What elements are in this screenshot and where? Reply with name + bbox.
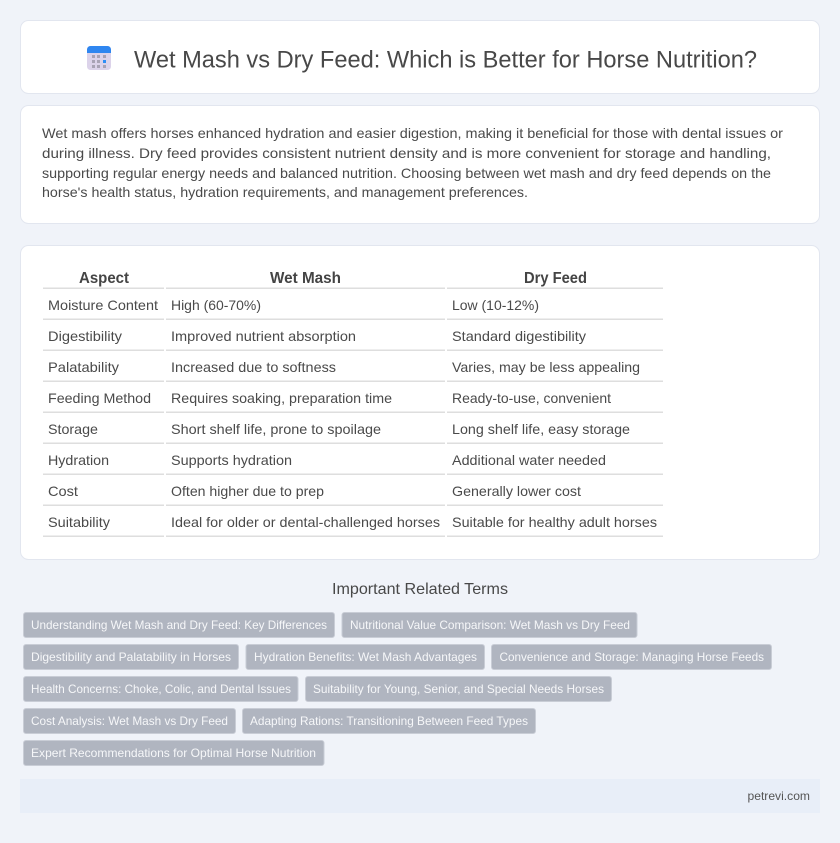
row: moisture content (48, 297, 539, 313)
row: palatability: Palatability (48, 359, 119, 375)
row: suitability: Suitability (48, 514, 110, 530)
row: palatability: Varies, may be less appealing (452, 359, 640, 375)
row: suitability: Ideal for older or dental-challenged horses (171, 514, 440, 530)
tag (24, 612, 334, 638)
table header (79, 270, 587, 287)
row: storage: Long shelf life, easy storage (452, 421, 630, 437)
row: feeding method: Feeding Method (48, 390, 151, 406)
row: moisture content: High (60-70%) (171, 297, 261, 313)
table header: Wet Mash (270, 270, 341, 287)
tag (24, 644, 238, 670)
row: feeding method (48, 390, 611, 406)
tag: Hydration Benefits: Wet Mash Advantages (254, 650, 477, 664)
tag (246, 644, 484, 670)
row: digestibility: Digestibility (48, 328, 122, 344)
row: digestibility: Standard digestibility (452, 328, 586, 344)
row: moisture content: Moisture Content (48, 297, 158, 313)
intro text block: Wet mash offers horses enhanced hydration and easier digestion, making it beneficial for those with dental issues or (42, 125, 783, 141)
panel: comparison table (20, 246, 820, 560)
row: feeding method: Requires soaking, preparation time (171, 390, 392, 406)
tag: Convenience and Storage: Managing Horse Feeds (500, 650, 764, 664)
tag (24, 708, 236, 734)
row: moisture content: Low (10-12%) (452, 297, 539, 313)
row: digestibility: Improved nutrient absorption (171, 328, 356, 344)
tag: Digestibility and Palatability in Horses (31, 650, 231, 664)
intro text block: horse's health status, hydration requirements, and management preferences. (42, 184, 528, 200)
row: feeding method: Ready-to-use, convenient (452, 390, 611, 406)
tag: Adapting Rations: Transitioning Between Feed Types (250, 714, 528, 728)
row: hydration: Hydration (48, 452, 109, 468)
header panel (20, 20, 820, 94)
row: palatability: Increased due to softness (171, 359, 336, 375)
row: suitability: Suitable for healthy adult horses (452, 514, 657, 530)
tag list (24, 612, 772, 766)
row: palatability (48, 359, 640, 375)
intro text block: supporting regular energy needs and balanced nutrition. Choosing between wet mash and dry feed depends on the (42, 165, 771, 181)
row: hydration: Supports hydration (171, 452, 292, 468)
intro text block (42, 125, 783, 200)
row: cost: Cost (48, 483, 78, 499)
intro text block: during illness. Dry feed provides consistent nutrient density and is more convenient for storage and handling, (42, 145, 771, 161)
row: suitability (48, 514, 657, 530)
row: cost (48, 483, 581, 499)
row: hydration (48, 452, 606, 468)
title: Wet Mash vs Dry Feed: Which is Better for Horse Nutrition? (134, 46, 757, 74)
row: hydration: Additional water needed (452, 452, 606, 468)
row: storage (48, 421, 630, 437)
tag (24, 676, 298, 702)
tag: Understanding Wet Mash and Dry Feed: Key Differences (31, 618, 327, 632)
row: storage: Short shelf life, prone to spoilage (171, 421, 381, 437)
tag (242, 708, 536, 734)
panel: introduction (20, 106, 820, 224)
row: storage: Storage (48, 421, 98, 437)
tag: Suitability for Young, Senior, and Special Needs Horses (313, 682, 604, 696)
tag: Health Concerns: Choke, Colic, and Dental Issues (31, 682, 291, 696)
tag (342, 612, 637, 638)
tag: Expert Recommendations for Optimal Horse Nutrition (31, 746, 316, 760)
table header: Dry Feed (524, 270, 587, 287)
icon: calendar (87, 46, 111, 70)
row: digestibility (48, 328, 586, 344)
tag (24, 740, 324, 766)
tag (492, 644, 772, 670)
tag: Nutritional Value Comparison: Wet Mash vs Dry Feed (350, 618, 630, 632)
row: cost: Generally lower cost (452, 483, 581, 499)
footer source: petrevi.com (748, 789, 810, 803)
tag (306, 676, 612, 702)
tag: Cost Analysis: Wet Mash vs Dry Feed (31, 714, 228, 728)
footer (20, 779, 820, 813)
row: cost: Often higher due to prep (171, 483, 324, 499)
heading: important related terms: Important Related Terms (332, 581, 508, 598)
table header: Aspect (79, 270, 129, 287)
